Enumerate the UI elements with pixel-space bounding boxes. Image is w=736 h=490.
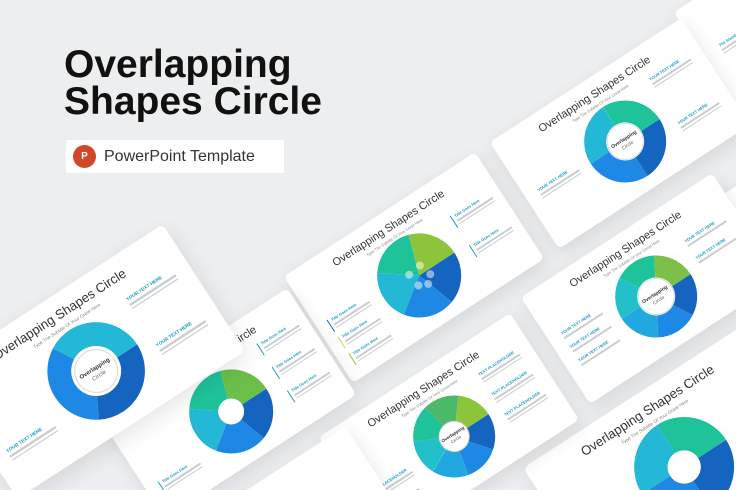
slide: top right ring: YOUR TEXT HERE (676, 102, 709, 125)
slide: right ring with arcs: YOUR TEXT HERE (568, 326, 601, 349)
slide: left-middle puzzle ring: Title Goes Here (260, 326, 287, 346)
slide: middle puzzle disc: Title Goes Here (453, 198, 480, 218)
slide: left-middle puzzle ring: Title Goes Here (161, 464, 188, 484)
slide: right ring with arcs: YOUR TEXT HERE (560, 313, 592, 336)
slide: big left ring: YOUR TEXT HERE (125, 274, 163, 302)
slide: big left ring (0, 224, 245, 490)
chart: six-segment ring (615, 256, 698, 338)
slide: top right ring: Type The Subtitle Of Your Great Here (571, 83, 630, 123)
icon: powerpoint (73, 145, 96, 168)
chart: flower ring: Circle (450, 434, 463, 445)
slide: middle puzzle disc: Title Goes Here (352, 336, 379, 356)
slide: middle puzzle disc (284, 152, 544, 383)
slide: bottom right large: Type The Subtitle Of Your Great Here (620, 398, 689, 446)
slide: middle puzzle disc: Title Goes Here (472, 227, 500, 248)
slide: top right ring: Overlapping Shapes Circle (537, 54, 653, 135)
slide: left-middle puzzle ring: Title Goes Here (290, 373, 318, 393)
slide: left-middle puzzle ring: Title Goes Here (275, 349, 302, 369)
chart: flower ring: Overlapping (440, 425, 465, 444)
slide: right ring with arcs: YOUR TEXT HERE (694, 237, 727, 260)
slide: bottom middle flower: Overlapping Shapes Circle (366, 349, 482, 430)
slide: bottom middle flower: TEXT PLACEHOLDER (477, 350, 515, 377)
slide: bottom right large: Overlapping Shapes Circle (579, 363, 717, 459)
title: Overlapping (64, 43, 292, 86)
badge: PowerPoint Template (66, 140, 284, 173)
slide: big left ring: YOUR TEXT HERE (155, 320, 193, 348)
chart: ring circle: Circle (621, 140, 635, 152)
slide: bottom middle flower (319, 313, 579, 490)
slide: right ring with arcs: YOUR TEXT HERE (577, 339, 609, 363)
slide: top right ring (490, 18, 736, 249)
slide: right ring with arcs (521, 173, 736, 404)
chart: flower ring (413, 396, 496, 478)
slide: left-middle puzzle ring: Overlapping Shapes Circle (143, 324, 259, 405)
chart: full puzzle disc (377, 233, 462, 318)
slide: big left ring: YOUR TEXT HERE (5, 426, 43, 454)
slide: middle puzzle disc: Title Goes Here (330, 302, 357, 322)
chart: disc bottom right (634, 417, 734, 490)
slide: top right ring: YOUR TEXT HERE (648, 59, 680, 82)
chart: three-segment ring (47, 322, 145, 420)
slide: big left ring: Type The Subtitle Of Your Great Here (32, 302, 101, 350)
slide: middle puzzle disc: Title Goes Here (341, 319, 368, 339)
badge: PowerPoint Template: PowerPoint Template (104, 148, 255, 165)
slide: top right ring: YOUR TEXT HERE (536, 169, 569, 193)
background slide: far right (696, 88, 736, 319)
chart: three-segment ring: Overlapping (79, 357, 111, 381)
title: Shapes Circle (64, 80, 322, 123)
slide: middle puzzle disc: Type The Subtitle Of Your Great Here (365, 217, 424, 257)
chart: three-segment ring: Circle (91, 369, 108, 383)
chart: ring circle: Overlapping (610, 129, 638, 150)
title (64, 43, 322, 123)
slide: left-middle puzzle ring: Type The Subtitle Of Your Great Here (177, 353, 236, 393)
slide: middle puzzle disc: Overlapping Shapes Circle (331, 188, 447, 269)
background slide: top right corner (674, 0, 736, 119)
slide: bottom middle flower: TEXT PLACEHOLDER (490, 370, 528, 397)
slide: right ring with arcs: Type The Subtitle Of Your Great Here (602, 238, 661, 278)
icon: powerpoint: P (81, 151, 88, 162)
slide: left-middle puzzle ring (96, 288, 356, 490)
chart: six-segment ring: Circle (652, 295, 666, 307)
slide: right ring with arcs: YOUR TEXT HERE (683, 220, 716, 244)
slide: bottom right large (523, 320, 736, 490)
chart: gear puzzle ring (189, 369, 274, 454)
slide: right ring with arcs: Overlapping Shapes Circle (568, 209, 684, 290)
slide: bottom middle flower: Type The Subtitle Of Your Great Here (400, 378, 459, 418)
chart: six-segment ring: Overlapping (641, 284, 669, 305)
slide: bottom middle flower: TEXT PLACEHOLDER (503, 390, 541, 417)
chart: ring circle (584, 100, 666, 182)
background slide: bottom partial (154, 426, 414, 490)
